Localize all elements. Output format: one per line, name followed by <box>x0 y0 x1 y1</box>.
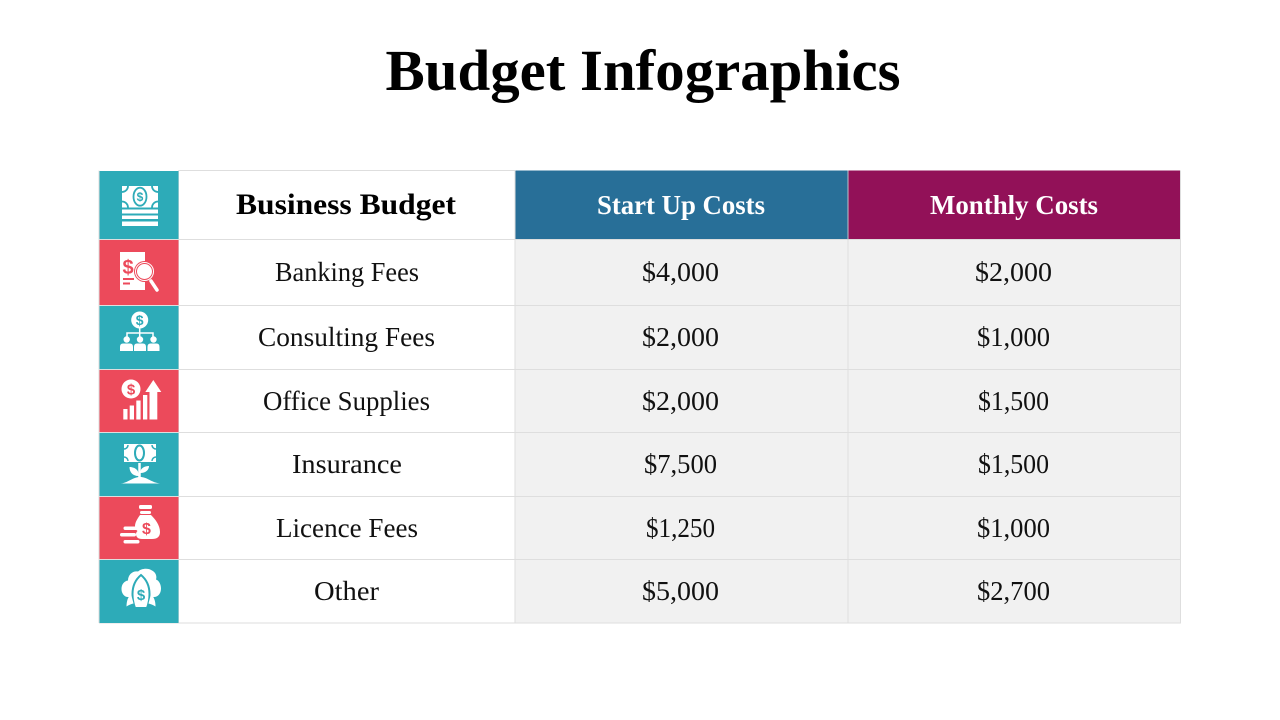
icon: growth chart with coin: $ <box>127 382 136 398</box>
row: consulting fees: Consulting Fees <box>258 321 435 352</box>
row: insurance: $1,500 <box>978 448 1049 479</box>
row: consulting fees: $1,000 <box>977 321 1050 352</box>
icon: banknote stack: $ <box>137 190 144 204</box>
header: monthly costs: Monthly Costs <box>930 190 1098 220</box>
title: Budget Infographics <box>386 38 900 103</box>
icon: money bag with speed lines <box>120 505 160 544</box>
icon: rocket and cloud <box>122 569 161 608</box>
icon: money plant <box>121 444 160 484</box>
icon: rocket and cloud: $ <box>137 587 146 604</box>
icon: document with magnifier <box>120 252 157 290</box>
row: consulting fees <box>258 321 1050 352</box>
row: licence fees: $1,000 <box>977 512 1050 543</box>
row: office supplies: Office Supplies <box>263 385 430 416</box>
header: business budget: Business Budget <box>236 188 456 221</box>
row: office supplies <box>263 385 1049 416</box>
row: licence fees: $1,250 <box>646 512 715 543</box>
row: office supplies: $2,000 <box>642 385 719 416</box>
header cell: monthly costs <box>848 170 1181 240</box>
row: banking fees: Banking Fees <box>275 256 419 287</box>
row: consulting fees: $2,000 <box>642 321 719 352</box>
icon: banknote stack <box>122 186 158 226</box>
icon: document with magnifier: $ <box>122 257 134 279</box>
budget table <box>99 170 1181 623</box>
row: other: Other <box>314 575 379 606</box>
row: other: $2,700 <box>977 575 1050 606</box>
grey cost columns background <box>515 240 1181 623</box>
row: licence fees <box>276 512 1050 543</box>
header cell: start up costs <box>515 170 848 240</box>
icon: dollar hierarchy: $ <box>136 312 144 328</box>
row: other: $5,000 <box>642 575 719 606</box>
header: start up costs: Start Up Costs <box>597 190 765 220</box>
row: other <box>314 575 1050 606</box>
row: office supplies: $1,500 <box>978 385 1049 416</box>
icon: dollar hierarchy <box>120 312 160 351</box>
row: insurance: $7,500 <box>644 448 717 479</box>
row: banking fees: $2,000 <box>975 256 1052 287</box>
icon: growth chart with coin <box>122 380 161 420</box>
icon: money bag with speed lines: $ <box>142 521 151 538</box>
row: licence fees: Licence Fees <box>276 512 418 543</box>
row: insurance <box>292 448 1049 479</box>
row: insurance: Insurance <box>292 448 402 479</box>
icon cell colours <box>100 171 178 623</box>
row: banking fees: $4,000 <box>642 256 719 287</box>
row: banking fees <box>275 256 1052 287</box>
